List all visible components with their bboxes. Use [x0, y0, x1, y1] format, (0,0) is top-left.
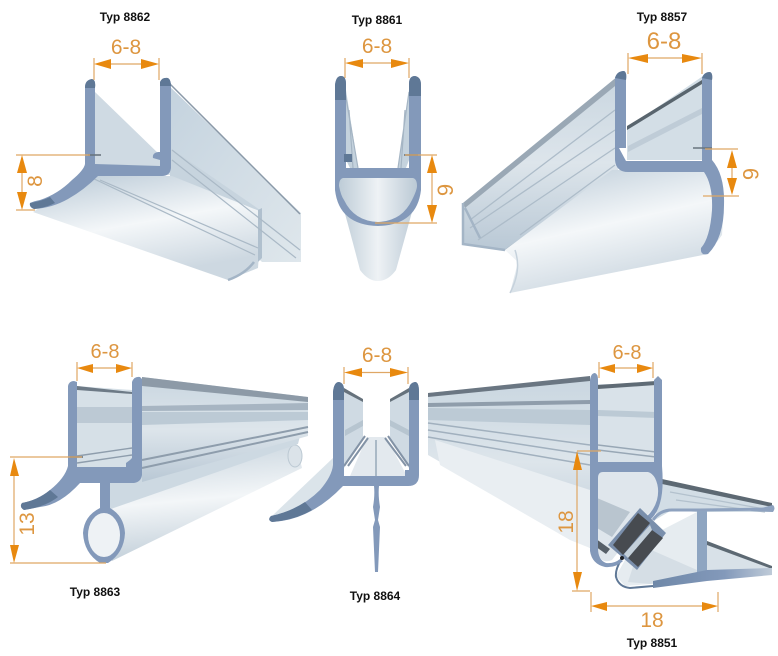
dimension: width 18: [591, 592, 718, 632]
dimension: width 6-8: 6-8: [362, 344, 392, 367]
panel: Typ 8857: [463, 10, 763, 293]
dimension: width 6-8: 6-8: [362, 35, 392, 58]
dimension: width 6-8: [599, 342, 653, 378]
panel: Typ 8863: [10, 341, 308, 599]
profile body 8864: [269, 382, 419, 572]
dimension: height 13: 13: [16, 512, 39, 536]
dimension: width 6-8: [77, 341, 132, 381]
dimension: height 13: [10, 457, 106, 563]
label: Typ 8864: Typ 8864: [350, 589, 401, 603]
magnet 8851: [608, 508, 666, 570]
dimension: width 6-8: [345, 35, 409, 78]
dimension: lip height 8: 8: [24, 175, 47, 187]
dimension: width 6-8: [628, 28, 702, 74]
dimension: width 6-8: 6-8: [91, 341, 119, 363]
dimension: width 6-8: [344, 344, 408, 384]
label: Typ 8861: Typ 8861: [352, 13, 403, 27]
dimension: height 6: [703, 149, 763, 196]
dimension: lip height 8: [16, 155, 90, 210]
dimension: width 18: 18: [640, 609, 664, 632]
label: Typ 8857: Typ 8857: [637, 10, 688, 24]
dimension: height 18: 18: [555, 510, 578, 534]
label: Typ 8862: Typ 8862: [100, 10, 151, 24]
label: Typ 8863: Typ 8863: [70, 585, 121, 599]
dimension: width 6-8: [94, 36, 159, 80]
label: Typ 8851: Typ 8851: [627, 636, 678, 650]
dimension: height 9: [375, 155, 458, 223]
dimension: width 6-8: 6-8: [613, 342, 641, 364]
sealing tube 8863: [105, 436, 302, 561]
second profile 8851: [616, 479, 774, 588]
dimension: width 6-8: 6-8: [647, 28, 681, 55]
profile body 8857: [463, 71, 724, 293]
panel: Typ 8864: [269, 344, 419, 603]
panel: Typ 8851: [428, 342, 774, 650]
panel: Typ 8861: [335, 13, 458, 281]
dimension: height 18: [555, 451, 601, 591]
profile body 8863: [21, 377, 308, 563]
dimension: height 9: 9: [433, 184, 458, 196]
panel: Typ 8862: [16, 10, 301, 280]
profile body 8862: [30, 78, 301, 280]
dimension: height 6: 6: [738, 168, 763, 180]
dimension: width 6-8: 6-8: [111, 36, 141, 59]
profile body 8851: [428, 373, 663, 567]
profile body 8861: [335, 76, 421, 281]
